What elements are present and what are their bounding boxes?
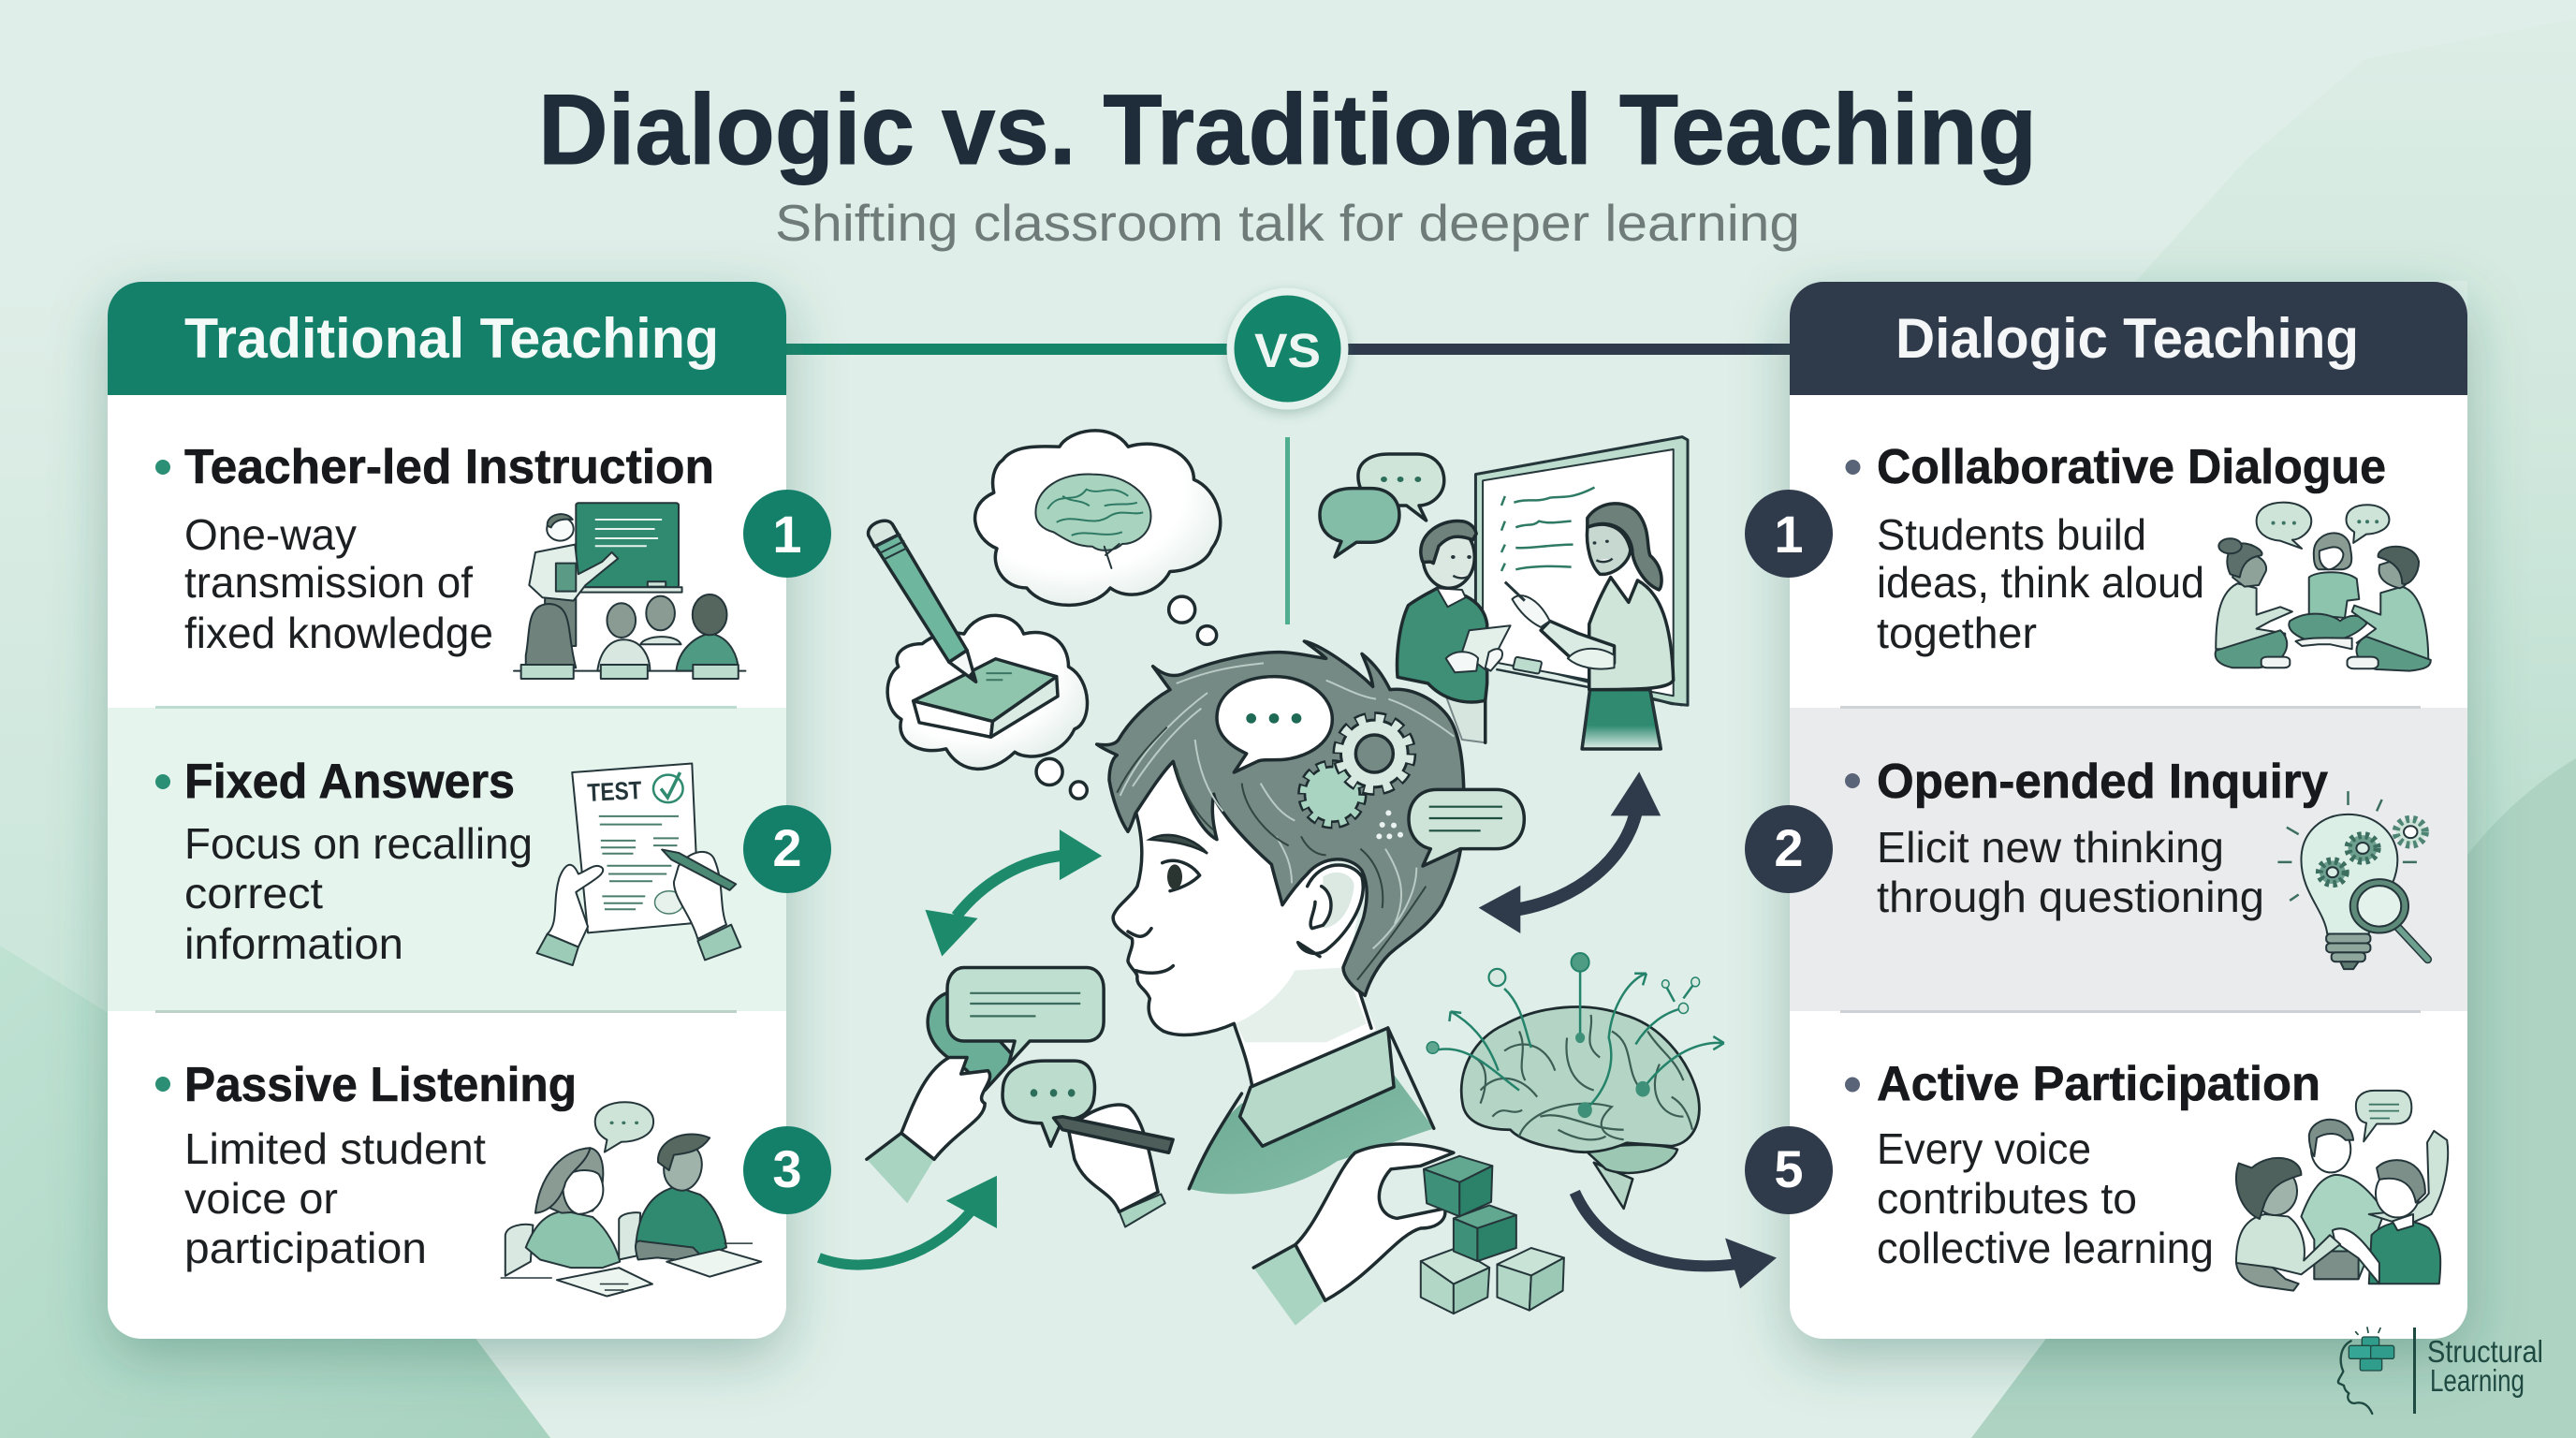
pencil <box>869 521 976 682</box>
item: active participation: Active Participation <box>1877 1057 2320 1111</box>
number badges left: 3 <box>772 1139 802 1198</box>
arrow: green from panel <box>819 1176 997 1265</box>
item: active participation: Every voice <box>1877 1124 2091 1173</box>
eye, nose and mouth <box>1128 835 1208 973</box>
thought cloud with book <box>887 615 1088 799</box>
speech bubble on hair <box>1217 677 1332 772</box>
item: passive listening: participation <box>184 1224 427 1272</box>
item: teacher-led instruction: transmission of <box>184 558 473 607</box>
left hand <box>867 1058 990 1203</box>
icon: lightbulb with gears and magnifier <box>2277 791 2428 969</box>
student with tablet <box>1398 521 1511 742</box>
item: teacher-led instruction: fixed knowledge <box>184 609 493 657</box>
logo wordmark <box>2427 1334 2543 1398</box>
vs badge <box>1226 288 1348 410</box>
hand placing blocks <box>1253 1144 1454 1326</box>
arrow: green two-way <box>925 829 1102 957</box>
item: fixed answers: information <box>184 919 403 968</box>
icon: students raising hands <box>2236 1091 2448 1291</box>
number badges left: 2 <box>772 818 802 877</box>
item: fixed answers: correct <box>184 869 323 917</box>
item: collaborative dialogue <box>1846 440 2386 657</box>
illustration: boy's head in profile <box>1097 641 1524 1089</box>
divider <box>155 706 737 709</box>
arrow: dark to panel <box>1574 1192 1777 1288</box>
panel: traditional teaching <box>108 282 786 1339</box>
right hand with pen <box>1054 1105 1173 1227</box>
number badges right: 5 <box>1774 1139 1804 1198</box>
item: collaborative dialogue: together <box>1877 609 2037 657</box>
item: fixed answers <box>155 755 533 968</box>
item: open-ended inquiry <box>1845 755 2328 921</box>
number badges right: 2 <box>1774 818 1804 877</box>
face and neck <box>1113 761 1376 1089</box>
panel: dialogic teaching <box>1790 282 2467 1339</box>
item: teacher-led instruction: One-way <box>184 510 357 559</box>
illustration: shirt, hands, arrows, bubbles, blocks and brain <box>819 771 1777 1326</box>
item: active participation: collective learning <box>1877 1224 2214 1272</box>
number badges left <box>743 490 831 1214</box>
teacher pointing at whiteboard <box>1505 504 1674 749</box>
whiteboard <box>1475 437 1688 705</box>
item: passive listening: Limited student <box>184 1124 486 1173</box>
number badges left: 1 <box>772 505 802 564</box>
shirt and collar <box>1189 1028 1434 1194</box>
icon: test paper held in hands <box>536 764 740 965</box>
item: open-ended inquiry: through questioning <box>1877 873 2264 921</box>
item: collaborative dialogue: Students build <box>1877 510 2146 559</box>
thought cloud with brain <box>975 431 1221 644</box>
panel header: dialogic: Dialogic Teaching <box>1895 307 2359 370</box>
connector line: dark <box>1344 344 1792 355</box>
speech bubbles held in hands <box>928 967 1104 1146</box>
speech bubbles above student <box>1320 454 1444 557</box>
item: passive listening: Passive Listening <box>184 1058 577 1112</box>
title: Dialogic vs. Traditional Teaching <box>538 73 2037 185</box>
illustration: teacher and student at whiteboard <box>1320 437 1688 749</box>
logo wordmark: Structural <box>2427 1334 2543 1369</box>
item: fixed answers: Focus on recalling <box>184 819 533 868</box>
item: open-ended inquiry: Elicit new thinking <box>1877 823 2224 872</box>
speech bubble beside head <box>1409 789 1524 866</box>
item: teacher-led instruction <box>155 440 714 657</box>
illustration: thought clouds, pencil and book <box>869 431 1221 799</box>
stacked blocks <box>1421 1156 1564 1313</box>
vs badge: VS <box>1254 324 1321 377</box>
hair <box>1097 641 1464 995</box>
icon: test paper held in hands: TEST <box>587 776 643 807</box>
item: open-ended inquiry: Open-ended Inquiry <box>1877 755 2328 809</box>
logo divider <box>2413 1328 2416 1414</box>
item: fixed answers: Fixed Answers <box>184 755 515 809</box>
item: active participation: contributes to <box>1877 1174 2137 1223</box>
item: passive listening: voice or <box>184 1174 338 1223</box>
logo icon <box>2338 1328 2394 1414</box>
item: collaborative dialogue: Collaborative Dialogue <box>1877 440 2386 494</box>
divider <box>1840 706 2421 709</box>
center vertical divider <box>1285 437 1290 624</box>
gears on hair <box>1304 719 1410 836</box>
ear <box>1298 865 1363 957</box>
icon: teacher at chalkboard <box>514 503 745 679</box>
item: passive listening <box>155 1058 577 1272</box>
brain with network <box>1427 953 1724 1209</box>
logo: Structural Learning <box>2338 1328 2543 1414</box>
logo wordmark: Learning <box>2430 1363 2525 1398</box>
arrow: dark two-way <box>1479 771 1661 933</box>
subtitle: Shifting classroom talk for deeper learning <box>775 194 1800 252</box>
number badges right: 1 <box>1774 505 1804 564</box>
item: collaborative dialogue: ideas, think aloud <box>1877 558 2204 607</box>
item: teacher-led instruction: Teacher-led Instruction <box>184 440 714 494</box>
connector line: green <box>784 344 1234 355</box>
item: active participation <box>1845 1057 2320 1272</box>
number badges right <box>1745 490 1833 1214</box>
icon: two students listening <box>501 1102 761 1297</box>
panel header: traditional: Traditional Teaching <box>184 307 719 370</box>
icon: students in discussion circle <box>2216 503 2431 671</box>
